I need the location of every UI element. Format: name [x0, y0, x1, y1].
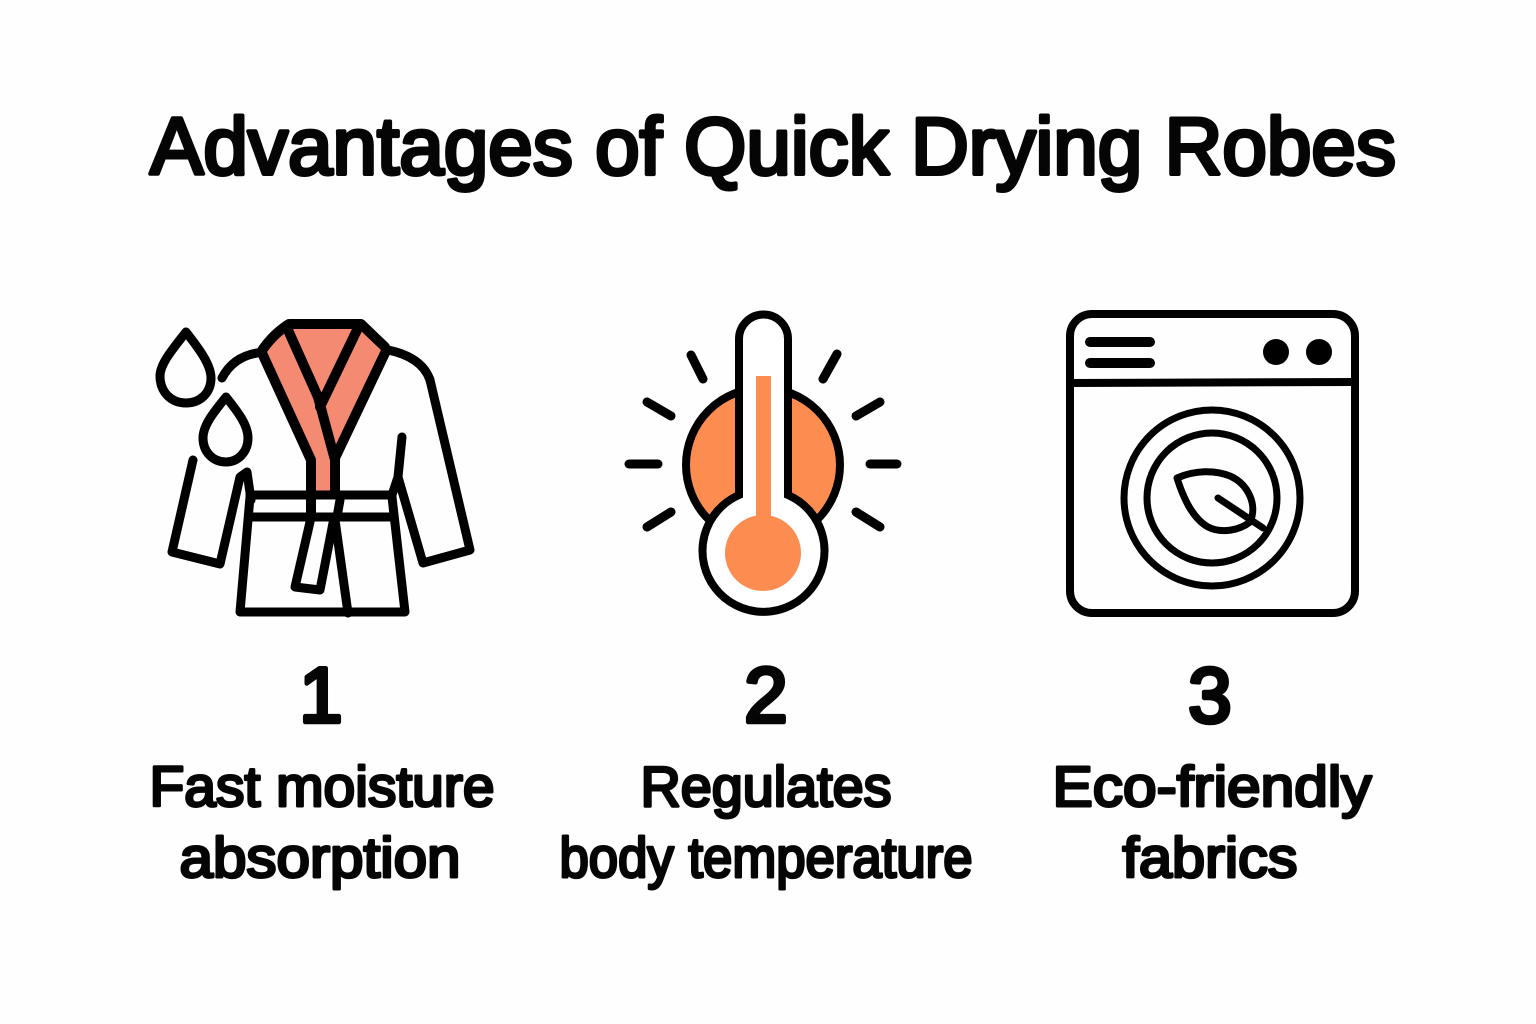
thermometer mercury: [725, 376, 801, 591]
thermometer body: [702, 314, 824, 612]
label: eco-friendly fabrics: fabrics: [1122, 826, 1298, 890]
label: eco-friendly fabrics: [1052, 755, 1372, 890]
control panel divider: [1070, 382, 1355, 383]
machine body: [1070, 314, 1355, 613]
number 1: 1: [299, 651, 343, 739]
number 3: 3: [1188, 651, 1232, 739]
robe collar outline: [261, 324, 385, 513]
control panel lines: [1090, 342, 1150, 363]
label: regulates body temperature: Regulates: [640, 755, 892, 819]
icon: large water drop: [160, 332, 211, 403]
robe outline: [172, 350, 470, 613]
icon: robe with water drops: [160, 324, 470, 613]
control knobs: [1263, 339, 1332, 365]
label: fast moisture absorption: absorption: [180, 826, 460, 890]
icon: small water drop: [203, 397, 248, 462]
number 2: 2: [744, 651, 788, 739]
machine drum: [1124, 410, 1300, 586]
robe collar fill: [264, 326, 384, 491]
sun rays: [629, 354, 897, 527]
sun disc: [686, 388, 840, 542]
icon: thermometer with sun: [629, 314, 897, 612]
panel: regulates body temperature: [560, 314, 972, 890]
icon: washing machine with leaf: [1070, 314, 1355, 613]
panel: eco-friendly fabrics: [1052, 314, 1372, 890]
label: fast moisture absorption: Fast moisture: [150, 755, 494, 819]
title: Advantages of Quick Drying Robes: [150, 102, 1396, 192]
leaf: [1177, 472, 1263, 531]
label: regulates body temperature: [560, 755, 972, 890]
panel: fast moisture absorption: [150, 324, 494, 890]
label: eco-friendly fabrics: Eco-friendly: [1052, 755, 1372, 819]
label: regulates body temperature: body temperature: [560, 826, 972, 890]
label: fast moisture absorption: [150, 755, 494, 890]
